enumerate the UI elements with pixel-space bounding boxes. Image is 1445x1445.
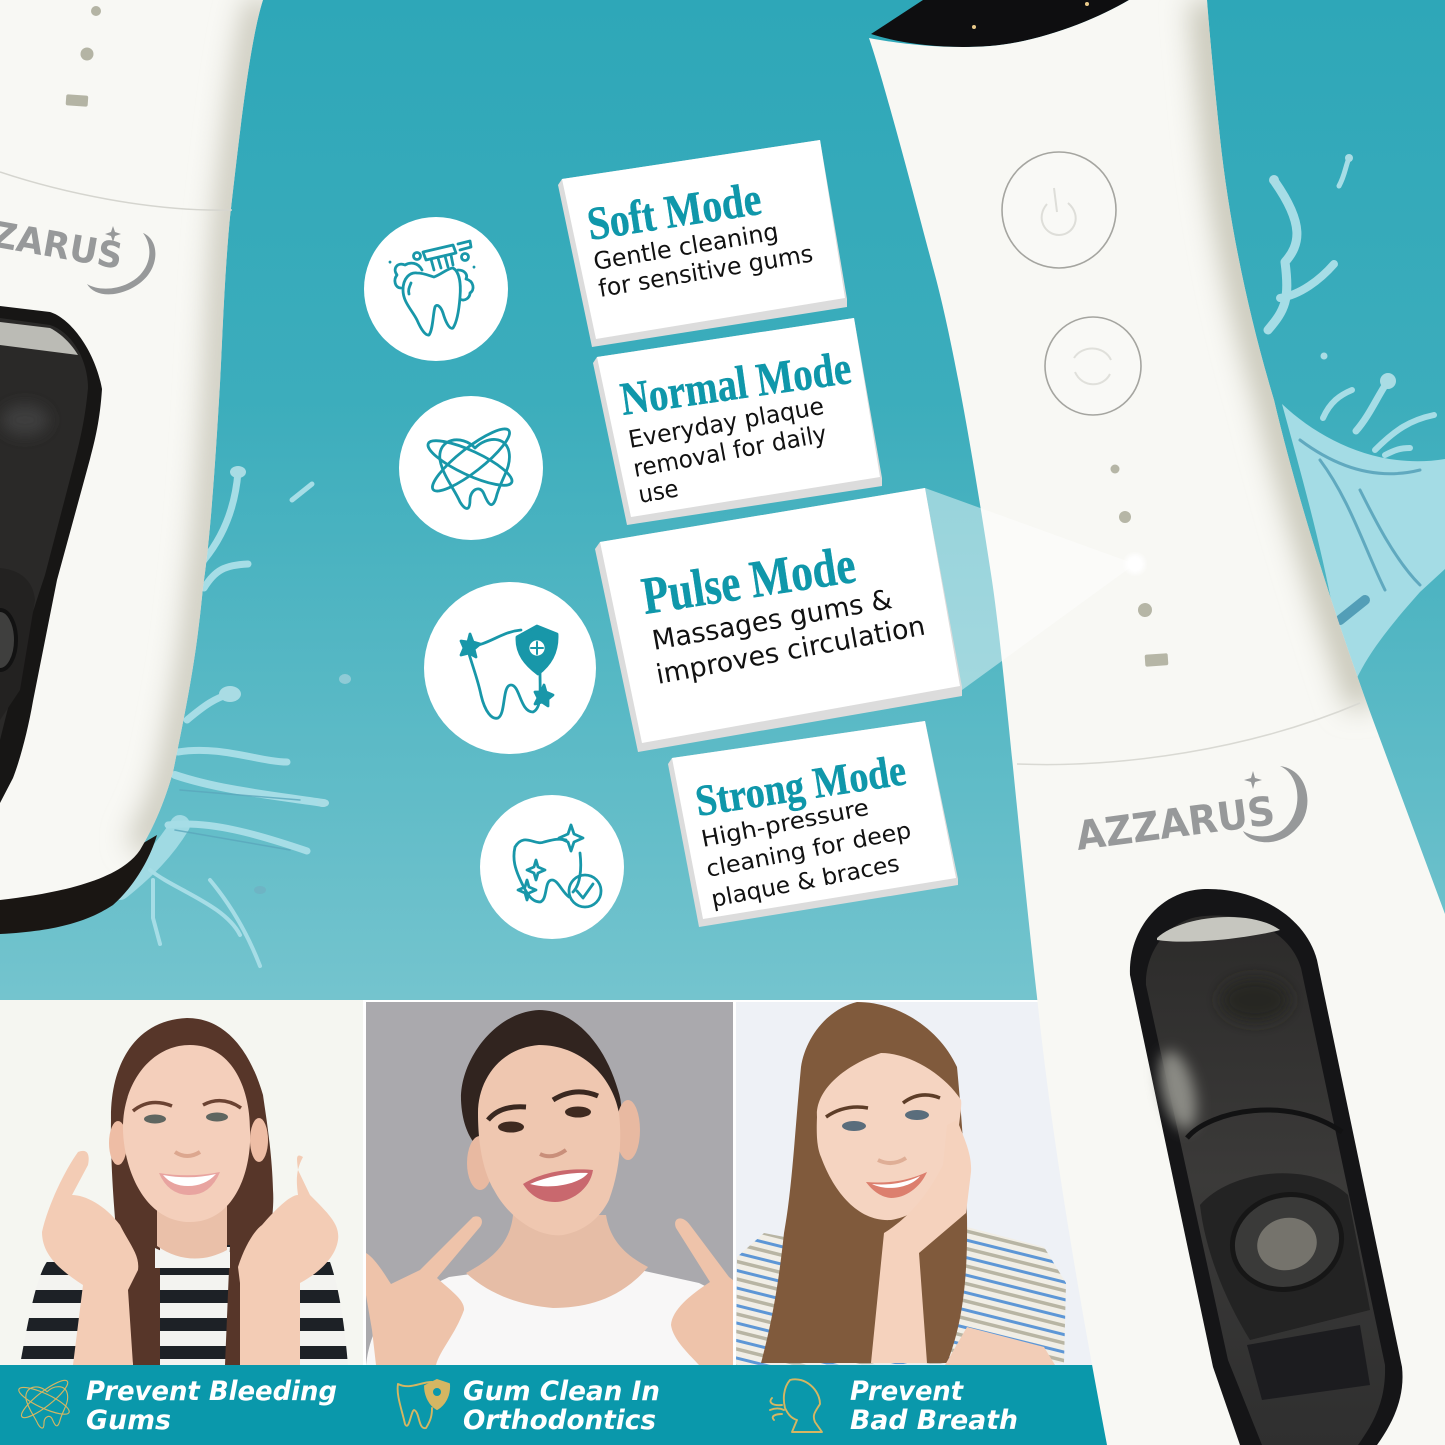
nozzle lights (972, 2, 1089, 29)
card: soft mode (558, 140, 847, 347)
icon: heart tooth atom (399, 396, 543, 540)
smile (866, 1172, 927, 1198)
face (817, 1053, 961, 1220)
card: pulse mode: Massages gums & (650, 584, 895, 657)
benefit: gum clean in orthodontics: Gum Clean In (463, 1376, 660, 1407)
ears (109, 1121, 127, 1165)
benefit: prevent bleeding gums (16, 1376, 337, 1436)
striped shirt (20, 1245, 348, 1365)
card: soft mode: Gentle cleaning (591, 217, 780, 276)
benefit: gum clean in orthodontics (398, 1376, 660, 1436)
card: normal mode: Everyday plaque (626, 392, 826, 454)
left hand and arm (42, 1151, 138, 1365)
benefit: prevent bad breath: Bad Breath (850, 1405, 1018, 1436)
water splash: right (1268, 154, 1445, 680)
hand on cheek (871, 1120, 971, 1363)
ears (467, 1136, 490, 1190)
shirt (366, 1270, 733, 1365)
water window (1130, 889, 1403, 1445)
card: normal mode: use (636, 474, 680, 509)
nose (540, 1150, 566, 1156)
nozzle tip (871, 0, 1129, 47)
card: strong mode: cleaning for deep (704, 818, 913, 883)
forearm (945, 1327, 1055, 1365)
face (478, 1045, 620, 1235)
water window (0, 306, 102, 803)
benefit: gum clean in orthodontics: Orthodontics (463, 1405, 656, 1436)
logo: azzarus: AZZARUS (1073, 788, 1278, 860)
body shading (1207, 0, 1365, 705)
background (0, 0, 1445, 1000)
hair (111, 1018, 273, 1365)
neck (466, 1215, 648, 1308)
benefit: prevent bleeding gums: Prevent Bleeding (86, 1376, 337, 1407)
smile (159, 1172, 220, 1195)
eyes (498, 1122, 524, 1132)
body (869, 0, 1445, 1445)
product: right water flosser (869, 0, 1445, 1445)
body (0, 0, 263, 900)
card: pulse mode: Pulse Mode (638, 536, 859, 626)
card: strong mode: High-pressure (699, 795, 871, 853)
spotlight beam (925, 488, 1135, 690)
black base (0, 835, 157, 934)
card: normal mode (593, 318, 882, 525)
hair (461, 1010, 621, 1150)
face (123, 1045, 250, 1222)
active indicator light (1122, 551, 1148, 577)
photo: woman with finger hearts (0, 1000, 363, 1365)
card: normal mode: Normal Mode (617, 342, 854, 426)
water splash: left (120, 466, 351, 966)
seam (1017, 703, 1360, 765)
card: normal mode: removal for daily (631, 420, 829, 483)
benefit: prevent bad breath: Prevent (850, 1376, 964, 1407)
benefit: prevent bleeding gums: Gums (86, 1405, 171, 1436)
card: strong mode: Strong Mode (692, 745, 909, 826)
seam (0, 172, 232, 210)
card: pulse mode: improves circulation (654, 611, 928, 691)
icon: gold face breathing (770, 1379, 822, 1432)
bottom benefit strip (0, 1365, 1200, 1445)
indicator dots (66, 6, 101, 107)
eyes (842, 1121, 866, 1131)
card: strong mode: plaque & braces (709, 851, 902, 913)
benefit: prevent bad breath (770, 1376, 1018, 1436)
neck (157, 1206, 227, 1258)
photo: woman pointing at smile (366, 1002, 733, 1365)
collar (155, 1248, 230, 1268)
product: left water flosser (0, 0, 263, 934)
left hand (366, 1216, 482, 1365)
card: soft mode: for sensitive gums (596, 239, 815, 303)
striped shirt (736, 1227, 1066, 1365)
icon: gold tooth with shield (398, 1380, 449, 1428)
right hand and arm (238, 1155, 338, 1365)
icon: sparkling tooth with check (480, 795, 624, 939)
eyes (144, 1114, 166, 1124)
card: strong mode (668, 721, 958, 927)
nose (175, 1152, 200, 1156)
indicator lights (1110, 464, 1168, 667)
icon: tooth with shield (424, 582, 596, 754)
body shading (140, 0, 263, 850)
smile (523, 1169, 593, 1202)
photo: woman with hand on cheek (736, 1002, 1106, 1365)
icon: gold heart tooth atom (16, 1376, 72, 1428)
nose (878, 1158, 906, 1163)
logo (0, 214, 155, 294)
mode button (1045, 317, 1141, 415)
power button (1002, 152, 1116, 268)
hair (761, 1002, 967, 1363)
icon: tooth with toothbrush (364, 217, 508, 361)
card: pulse mode (595, 488, 962, 752)
right hand (671, 1218, 733, 1365)
card: soft mode: Soft Mode (584, 173, 765, 251)
